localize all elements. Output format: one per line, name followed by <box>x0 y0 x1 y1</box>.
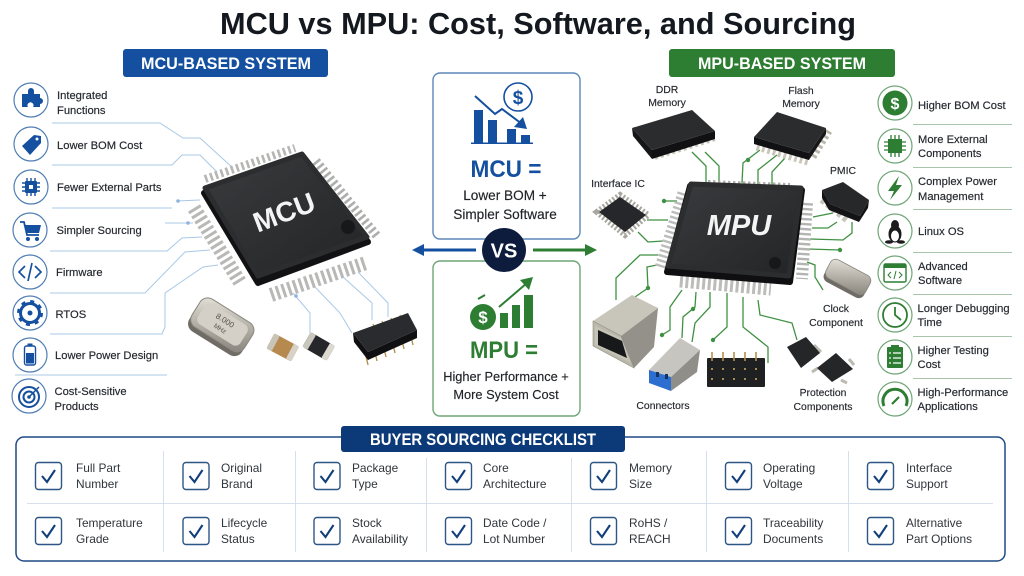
component: DDR memory: DDR <box>656 85 679 96</box>
item: High-Performance Applications: Applications <box>918 401 978 413</box>
item: Advanced Software: Advanced <box>918 261 968 273</box>
component: crystal 8.000 MHz: MHz <box>212 323 227 336</box>
component: pin header <box>707 352 765 387</box>
item: Integrated Functions: Integrated <box>57 90 107 102</box>
heading: buyer sourcing checklist <box>341 426 625 452</box>
arrow: toward MCU <box>412 244 476 256</box>
item: High-Performance Applications: High-Performance <box>918 387 1008 399</box>
component: clock crystal: Component <box>809 318 863 329</box>
text: higher performance + more system cost: More System Cost <box>453 387 559 402</box>
heading: MCU-based system: MCU-BASED SYSTEM <box>141 54 311 73</box>
item: Integrated Functions <box>14 83 107 117</box>
item: Higher BOM Cost: Higher BOM Cost <box>918 100 1007 112</box>
component: protection diodes: Protection <box>800 388 847 399</box>
item: Full Part Number <box>36 461 121 491</box>
item: Higher Testing Cost: Higher Testing <box>918 345 989 357</box>
item: Lower Power Design: Lower Power Design <box>55 350 158 362</box>
item: High-Performance Applications <box>878 382 1008 416</box>
item: Cost-Sensitive Products: Products <box>54 401 99 413</box>
text: lower BOM + simpler software: Lower BOM + <box>463 188 547 203</box>
icon: cost going down: $ <box>513 88 524 109</box>
component: protection diodes: Components <box>794 402 852 413</box>
item: Complex Power Management: Complex Power <box>918 176 997 188</box>
title: MCU vs MPU: Cost, Software, and Sourcing <box>220 6 856 41</box>
heading: MPU-based system: MPU-BASED SYSTEM <box>698 54 866 73</box>
component: DDR memory: Memory <box>648 98 687 109</box>
item: Memory Size: Size <box>629 477 653 491</box>
item: Memory Size <box>590 461 672 491</box>
item: Original Brand <box>183 461 262 491</box>
text: lower BOM + simpler software: Simpler Software <box>453 207 557 222</box>
item: Interface Support: Interface <box>906 461 953 475</box>
text: higher performance + more system cost: Higher Performance + <box>443 369 569 384</box>
component: inductor <box>302 332 335 361</box>
item: More External Components: Components <box>918 148 982 160</box>
panel: MPU summary <box>433 261 580 416</box>
item: Alternative Part Options: Alternative <box>906 516 963 530</box>
item: Date Code / Lot Number: Date Code / <box>483 516 547 530</box>
item: Lower BOM Cost <box>14 127 143 161</box>
item: RTOS <box>13 296 86 330</box>
item: Simpler Sourcing: Simpler Sourcing <box>56 225 142 237</box>
item: Firmware: Firmware <box>56 267 103 279</box>
item: Interface Support <box>868 461 953 491</box>
item: Date Code / Lot Number <box>446 516 547 546</box>
label: MPU: MPU <box>707 210 772 242</box>
panel: MPU feature list <box>878 86 1010 416</box>
heading: MPU-based system <box>669 49 895 77</box>
item: Temperature Grade: Grade <box>76 532 109 546</box>
item: Linux OS: Linux OS <box>918 226 964 238</box>
item: Temperature Grade <box>36 516 143 546</box>
item: Original Brand: Brand <box>221 477 253 491</box>
connector lines: MCU to parts <box>293 272 388 333</box>
item: Linux OS <box>878 214 964 248</box>
item: Traceability Documents: Documents <box>763 532 823 546</box>
item: RoHS / REACH: REACH <box>629 532 671 546</box>
item: Lower BOM Cost: Lower BOM Cost <box>57 140 143 152</box>
item: RoHS / REACH: RoHS / <box>629 516 668 530</box>
arrow: toward MPU <box>533 244 597 256</box>
item: Simpler Sourcing <box>13 213 142 247</box>
label: MCU: MCU <box>249 187 319 238</box>
component: interface IC <box>591 179 648 235</box>
badge: VS <box>482 228 526 272</box>
item: RoHS / REACH <box>590 516 671 546</box>
heading: MPU =: MPU = <box>470 337 538 364</box>
connector lines: MPU to parts <box>616 150 852 363</box>
icon: cost going up <box>470 277 533 330</box>
item: Cost-Sensitive Products <box>12 379 127 413</box>
item: Advanced Software: Software <box>918 275 962 287</box>
item: Operating Voltage: Voltage <box>763 477 803 491</box>
item: RTOS: RTOS <box>56 309 86 321</box>
heading: MCU-based system <box>123 49 328 77</box>
component: flash memory: Memory <box>782 99 821 110</box>
item: Fewer External Parts <box>14 170 162 204</box>
item: Package Type: Type <box>352 477 378 491</box>
item: Higher Testing Cost <box>878 340 989 374</box>
chip: MCU <box>194 148 377 295</box>
component: clock crystal: Clock <box>823 304 850 315</box>
item: Package Type: Package <box>352 461 399 475</box>
icon: cost going down <box>471 83 533 144</box>
component: RJ45 connector <box>593 295 658 368</box>
item: Higher Testing Cost: Cost <box>918 359 941 371</box>
item: Interface Support: Support <box>906 477 948 491</box>
item: Original Brand: Original <box>221 461 262 475</box>
item: Firmware <box>13 255 103 289</box>
dividers <box>913 124 1012 378</box>
panel: MCU summary <box>433 73 580 239</box>
item: Alternative Part Options: Part Options <box>906 532 972 546</box>
item: Core Architecture <box>446 461 547 491</box>
component: PMIC: PMIC <box>830 166 856 177</box>
item: Lower Power Design <box>13 338 158 372</box>
component: USB connector <box>649 338 700 391</box>
item: More External Components <box>878 129 988 163</box>
item: Traceability Documents: Traceability <box>763 516 823 530</box>
item: Higher BOM Cost <box>878 86 1007 120</box>
text: lower BOM + simpler software <box>453 188 557 222</box>
item: Stock Availability <box>314 516 408 546</box>
icon: cost going up: $ <box>478 308 488 327</box>
item: Longer Debugging Time: Time <box>918 317 942 329</box>
component: PMIC <box>822 166 869 222</box>
item: Longer Debugging Time <box>878 298 1010 332</box>
item: Cost-Sensitive Products: Cost-Sensitive <box>54 386 127 398</box>
component: clock crystal <box>809 257 873 329</box>
panel: MCU feature connector lines <box>15 123 233 375</box>
text: higher performance + more system cost <box>443 369 569 402</box>
panel: MCU feature list <box>12 83 162 413</box>
component: capacitor <box>266 333 299 362</box>
item: Operating Voltage <box>726 461 815 491</box>
item: Memory Size: Memory <box>629 461 672 475</box>
component: interface IC: Interface IC <box>591 179 645 190</box>
panel: buyer sourcing checklist <box>16 426 1005 561</box>
component: flash memory <box>754 86 829 161</box>
item: Higher BOM Cost: $ <box>891 96 900 113</box>
item: Package Type <box>314 461 399 491</box>
badge: VS: VS <box>491 240 517 262</box>
component: DDR memory <box>632 85 715 159</box>
item: Lifecycle Status: Status <box>221 532 255 546</box>
item: Full Part Number: Full Part <box>76 461 121 475</box>
component: crystal 8.000 MHz: 8.000 <box>214 312 236 330</box>
component: crystal 8.000 MHz <box>185 294 257 360</box>
heading: MCU =: MCU = <box>470 156 542 183</box>
item: Date Code / Lot Number: Lot Number <box>483 532 545 546</box>
item: Complex Power Management: Management <box>918 191 984 203</box>
item: Fewer External Parts: Fewer External Parts <box>57 182 162 194</box>
item: More External Components: More External <box>918 134 988 146</box>
item: Longer Debugging Time: Longer Debugging <box>918 303 1010 315</box>
item: Full Part Number: Number <box>76 477 118 491</box>
component: flash memory: Flash <box>788 86 814 97</box>
item: Stock Availability: Availability <box>352 532 408 546</box>
item: Operating Voltage: Operating <box>763 461 815 475</box>
item: Core Architecture: Core <box>483 461 509 475</box>
component: protection diodes <box>787 337 854 413</box>
item: Integrated Functions: Functions <box>57 105 106 117</box>
component: pin header <box>353 313 417 365</box>
heading: buyer sourcing checklist: BUYER SOURCING CHECKLIST <box>370 431 596 449</box>
item: Lifecycle Status: Lifecycle <box>221 516 268 530</box>
chip: MPU <box>660 182 807 288</box>
item: Alternative Part Options <box>868 516 972 546</box>
item: Core Architecture: Architecture <box>483 477 547 491</box>
item: Stock Availability: Stock <box>352 516 382 530</box>
label: connectors: Connectors <box>636 401 690 412</box>
item: Temperature Grade: Temperature <box>76 516 143 530</box>
item: Complex Power Management <box>878 171 997 205</box>
item: Traceability Documents <box>726 516 823 546</box>
item: Advanced Software <box>878 256 968 290</box>
item: Lifecycle Status <box>183 516 268 546</box>
